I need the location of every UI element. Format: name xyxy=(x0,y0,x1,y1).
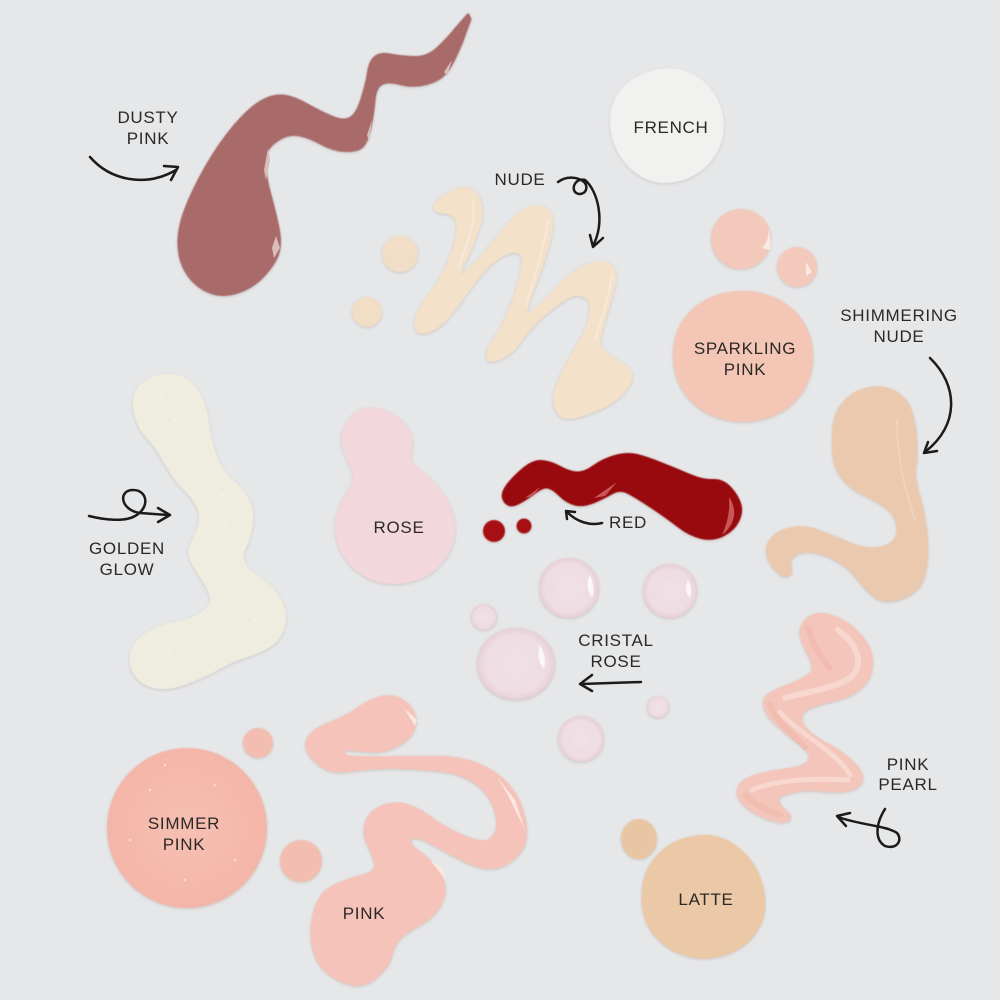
label: simmer pink: PINK xyxy=(163,835,205,854)
swatch: cristal rose xyxy=(471,558,697,762)
label: pink pearl: PEARL xyxy=(878,775,938,794)
arrow: cristal rose xyxy=(580,675,641,691)
swatch: dusty pink xyxy=(179,15,470,294)
label: golden glow: GLOW xyxy=(100,560,154,579)
swatch: simmer pink xyxy=(107,728,322,908)
arrow: shimmering nude xyxy=(924,358,951,453)
label: pink pearl: PINK xyxy=(887,755,929,774)
label: cristal rose: ROSE xyxy=(591,652,641,671)
label: nude: NUDE xyxy=(495,170,545,189)
arrow: red xyxy=(566,511,602,524)
swatch: red xyxy=(483,454,741,542)
label: shimmering nude: SHIMMERING xyxy=(840,306,958,325)
label: red: RED xyxy=(609,513,647,532)
label: french: FRENCH xyxy=(633,118,709,137)
swatch: shimmering nude xyxy=(767,388,927,600)
label: sparkling pink: PINK xyxy=(724,360,766,379)
label: golden glow: GOLDEN xyxy=(89,539,165,558)
arrow: golden glow xyxy=(89,490,170,522)
label: pink: PINK xyxy=(343,904,385,923)
arrow: nude xyxy=(558,178,603,247)
swatch: sparkling pink xyxy=(673,209,817,422)
swatch: latte xyxy=(621,819,765,959)
swatch: nude xyxy=(352,189,631,418)
label: dusty pink: DUSTY xyxy=(117,108,179,127)
label: sparkling pink: SPARKLING xyxy=(694,339,796,358)
swatch: rose xyxy=(336,409,454,583)
swatch: pink pearl xyxy=(738,614,872,821)
swatch: french xyxy=(610,68,724,183)
label: dusty pink: PINK xyxy=(127,129,169,148)
arrow: dusty pink xyxy=(90,157,178,180)
swatch: pink xyxy=(307,697,526,984)
label: rose: ROSE xyxy=(374,518,424,537)
arrow: pink pearl xyxy=(837,809,899,847)
label: cristal rose: CRISTAL xyxy=(578,631,654,650)
label: shimmering nude: NUDE xyxy=(874,327,924,346)
swatch: golden glow xyxy=(131,375,285,688)
label: latte: LATTE xyxy=(678,890,734,909)
label: simmer pink: SIMMER xyxy=(148,814,220,833)
